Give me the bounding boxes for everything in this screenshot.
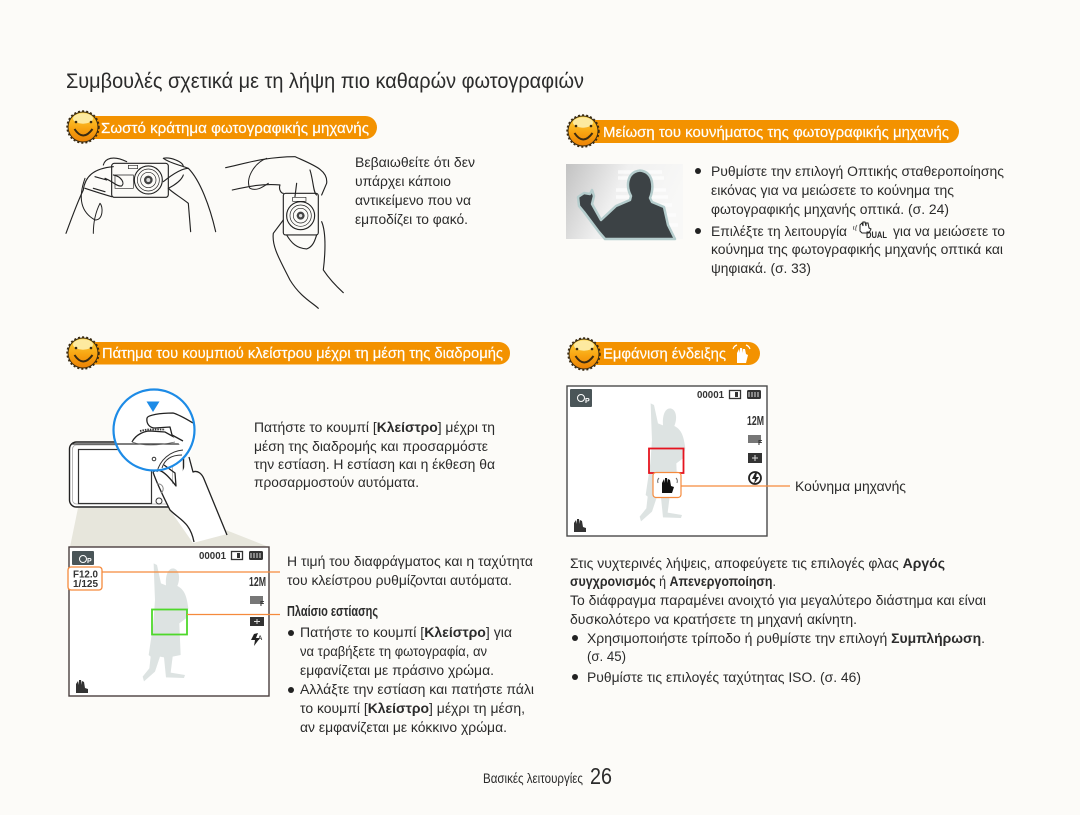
icon: battery [249, 551, 263, 560]
illustration: camera back with hand on shutter [70, 390, 227, 543]
list: focus frame instructions: εμφανίζεται με πράσινο χρώμα. [300, 663, 494, 679]
footer: section name and page number: 26 [590, 763, 612, 789]
icon: quality [748, 435, 763, 447]
text: night shooting advice: (σ. 45) [587, 649, 626, 665]
icon: dual IS mode [854, 222, 887, 241]
footer: section name and page number [483, 763, 612, 789]
callout box: aperture and shutter: 1/125 [73, 579, 98, 590]
panel: correct camera grip [66, 112, 475, 308]
icon: flash off [749, 472, 761, 484]
status: frame counter: 00001 [697, 390, 724, 401]
status: frame counter: 00001 [199, 551, 226, 562]
icon: blue magnifier circle [114, 390, 194, 470]
icon: quality [250, 596, 265, 608]
icon: quality: F [260, 601, 265, 608]
heading: reduce shake: Μείωση του κουνήματος της φωτογραφικής μηχανής [603, 124, 949, 141]
heading: half press [68, 338, 510, 368]
heading: shake indicator: Εμφάνιση ένδειξης [603, 346, 726, 362]
list: focus frame instructions [288, 625, 534, 736]
text: stabilisation tips: φωτογραφικής μηχανής οπτικά. (σ. 24) [711, 202, 949, 218]
text: night shooting advice: Χρησιμοποιήστε τρίποδο ή ρυθμίστε την επιλογή Συμπλήρωση. [587, 631, 985, 647]
text: stabilisation tips: για να μειώσετε το [893, 224, 1005, 240]
panel: reduce camera shake [566, 116, 1005, 277]
callout line: focus [187, 614, 280, 616]
icon: memory [730, 390, 740, 398]
camera screen: shake warning [567, 386, 790, 536]
focus frame [152, 610, 187, 634]
icon: metering [250, 617, 264, 626]
icon: stabilizer [574, 519, 586, 532]
list: focus frame instructions: το κουμπί [Κλείστρο] μέχρι τη μέση, [300, 701, 525, 717]
text: half press instructions [254, 420, 495, 491]
heading: focus frame: Πλαίσιο εστίασης [287, 603, 378, 620]
text: nothing blocks the lens [355, 155, 475, 228]
illustration: horizontal grip [66, 158, 216, 233]
text: stabilisation tips: ψηφιακά. (σ. 33) [711, 261, 811, 277]
text: night shooting advice [570, 556, 986, 686]
icon: quality: F [758, 440, 763, 447]
text: stabilisation tips: κούνημα της φωτογραφικής μηχανής οπτικά και [711, 242, 1003, 258]
text: half press instructions: Πατήστε το κουμπί [Κλείστρο] μέχρι τη [254, 420, 495, 436]
icon: camera mode: P [585, 398, 590, 405]
status: resolution: 12M [747, 413, 764, 428]
text: half press instructions: μέση της διαδρομής και προσαρμόστε [254, 439, 489, 455]
footer: section name and page number: Βασικές λειτουργίες [483, 771, 583, 787]
callout box: shake icon [653, 472, 681, 498]
callout box: aperture and shutter [68, 567, 102, 590]
icon: flash auto [251, 633, 263, 646]
label: camera shake: Κούνημα μηχανής [795, 479, 906, 495]
text: night shooting advice: Το διάφραγμα παραμένει ανοιχτό για μεγαλύτερο διάστημα και είναι [570, 593, 986, 609]
callout line: shake [681, 485, 790, 487]
silhouette: person [640, 403, 685, 521]
heading: shake indicator [568, 338, 760, 370]
icon: camera mode: P [87, 558, 92, 565]
text: night shooting advice: συγχρονισμός ή Απενεργοποίηση. [570, 574, 776, 590]
title: Συμβουλές σχετικά με τη λήψη πιο καθαρών φωτογραφιών [66, 69, 584, 93]
text: nothing blocks the lens: Βεβαιωθείτε ότι δεν [355, 155, 475, 171]
text: night shooting advice: δυσκολότερο να κρατήσετε τη μηχανή ακίνητη. [570, 612, 857, 628]
text: half press instructions: την εστίαση. Η εστίαση και η έκθεση θα [254, 457, 495, 473]
icon: battery [747, 390, 761, 399]
list: focus frame instructions: Πατήστε το κουμπί [Κλείστρο] για [300, 625, 512, 641]
text: nothing blocks the lens: αντικείμενο που να [355, 193, 471, 209]
text: night shooting advice: Στις νυχτερινές λήψεις, αποφεύγετε τις επιλογές φλας Αργός [570, 556, 945, 572]
text: stabilisation tips: εικόνας για να μειώσετε το κούνημα της [711, 183, 954, 199]
heading: reduce shake [568, 116, 959, 146]
callout line: aperture [102, 571, 280, 573]
text: stabilisation tips [695, 164, 1005, 277]
icon: flash auto: A [258, 636, 263, 642]
illustration: vertical grip [226, 157, 343, 308]
text: stabilisation tips: Ρυθμίστε την επιλογή Οπτικής σταθεροποίησης [711, 164, 1004, 180]
silhouette: person [143, 563, 188, 681]
text: half press instructions: προσαρμοστούν αυτόματα. [254, 475, 419, 491]
text: aperture note [287, 554, 533, 589]
text: stabilisation tips: Επιλέξτε τη λειτουργία [711, 224, 847, 240]
list: focus frame instructions: αν εμφανίζεται με κόκκινο χρώμα. [300, 720, 507, 736]
text: nothing blocks the lens: εμποδίζει το φακό. [355, 212, 468, 228]
camera screen: focus frame [68, 547, 280, 696]
text: aperture note: του κλείστρου ρυθμίζονται αυτόματα. [287, 573, 512, 589]
icon: metering [748, 453, 762, 463]
text: nothing blocks the lens: υπάρχει κάποιο [355, 174, 451, 190]
illustration: light beam to screen [70, 508, 269, 547]
icon: camera mode [570, 389, 592, 407]
icon: camera mode [72, 551, 94, 565]
callout box: aperture and shutter: F12.0 [73, 570, 98, 580]
text: night shooting advice: Ρυθμίστε τις επιλογές ταχύτητας ISO. (σ. 46) [587, 670, 861, 686]
list: focus frame instructions: Αλλάξτε την εστίαση και πατήστε πάλι [300, 682, 534, 698]
panel: half-press shutter [68, 338, 534, 736]
list: focus frame instructions: να τραβήξετε τη φωτογραφία, αν [300, 644, 487, 660]
icon: stabilizer [76, 680, 88, 693]
status: resolution: 12M [249, 574, 266, 589]
icon: shaking hand [733, 345, 750, 363]
icon: memory [232, 552, 242, 560]
icon: dual IS mode: DUAL [866, 230, 887, 241]
icon: press-down arrow [146, 402, 160, 412]
photo: man silhouette with motion blur [566, 164, 683, 239]
heading: half press: Πάτημα του κουμπιού κλείστρου μέχρι τη μέση της διαδρομής [102, 345, 503, 362]
panel: shake indication [567, 338, 986, 686]
heading: correct grip [68, 112, 377, 142]
heading: correct grip: Σωστό κράτημα φωτογραφικής μηχανής [101, 120, 369, 137]
text: aperture note: Η τιμή του διαφράγματος και η ταχύτητα [287, 554, 533, 570]
warning frame [649, 448, 684, 473]
